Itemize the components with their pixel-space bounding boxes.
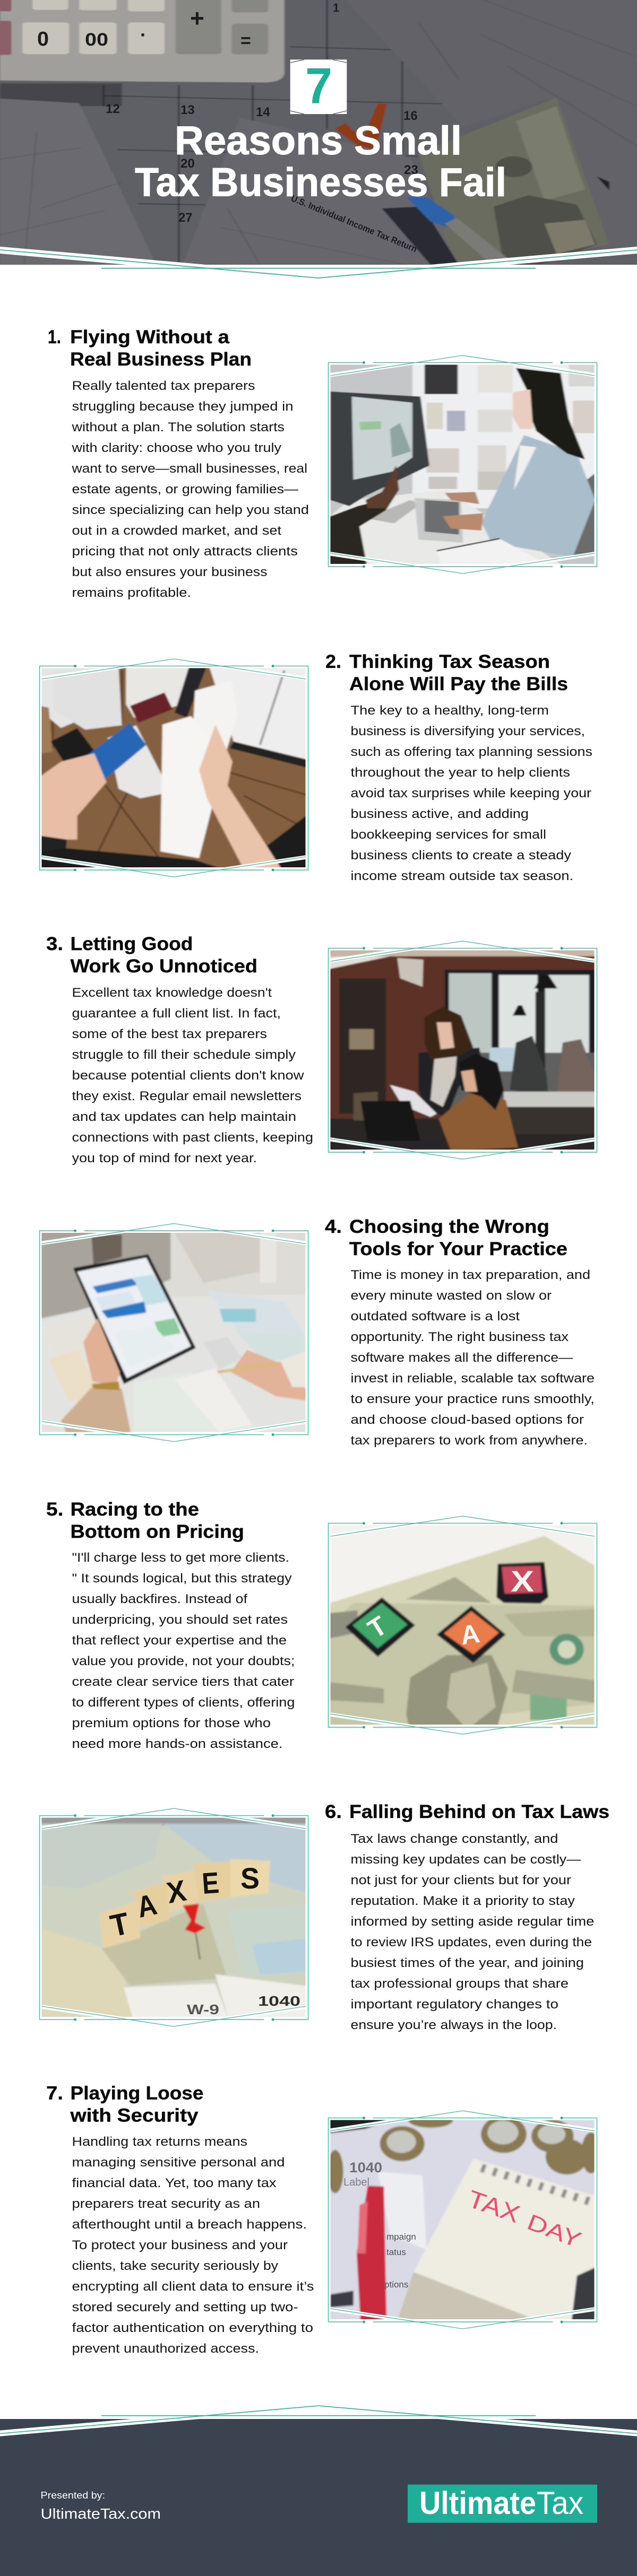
body text 4: opportunity. The right business tax <box>350 1330 569 1344</box>
body text 6: missing key updates can be costly— <box>350 1852 581 1867</box>
body text 7: stored securely and setting up two- <box>72 2300 298 2314</box>
form labels and handwriting: TAX <box>464 2185 523 2228</box>
heading 5 <box>46 1499 244 1542</box>
heading 3: 3. <box>46 934 63 954</box>
header calculator and calendar labels: + <box>190 4 204 32</box>
body text 6: not just for your clients but for your <box>350 1873 571 1887</box>
heading 2: 2. <box>325 651 341 672</box>
body text 7: To protect your business and your <box>72 2238 288 2252</box>
number badge: 7 <box>305 57 332 115</box>
body text 1: with clarity: choose who you truly <box>71 441 281 455</box>
TAX tile letters: T <box>363 1611 392 1644</box>
presented by text: Presented by: <box>40 2490 105 2501</box>
logo: UltimateTax: Tax <box>537 2485 583 2521</box>
body text 5: value you provide, not your doubts; <box>72 1654 295 1668</box>
presented by text <box>40 2490 161 2522</box>
body text 7: afterthought until a breach happens. <box>72 2217 307 2232</box>
title: Reasons Small <box>175 118 462 163</box>
body text 6 <box>350 1832 595 2032</box>
footer chevron band <box>0 2398 637 2434</box>
number badge <box>290 57 347 115</box>
body text 2: throughout the year to help clients <box>350 765 570 780</box>
heading 4 <box>325 1216 567 1259</box>
body text 5: " It sounds logical, but this strategy <box>72 1571 292 1586</box>
body text 6: informed by setting aside regular time <box>350 1914 595 1929</box>
tile letters and form labels <box>107 1861 300 2017</box>
title <box>135 118 506 205</box>
body text 1: pricing that not only attracts clients <box>72 544 298 559</box>
heading 5: 5. <box>46 1499 64 1520</box>
heading 4: Tools for Your Practice <box>349 1239 567 1259</box>
body text 4: and choose cloud-based options for <box>350 1413 584 1427</box>
body text 3: connections with past clients, keeping <box>72 1130 313 1145</box>
section 1: Flying Without a Real Business Plan <box>48 327 605 600</box>
form labels and handwriting: mpaign <box>386 2232 416 2242</box>
body text 3: you top of mind for next year. <box>72 1151 257 1165</box>
body text 6: reputation. Make it a priority to stay <box>350 1894 575 1908</box>
body text 7 <box>72 2135 314 2356</box>
tile letters and form labels: X <box>164 1874 189 1910</box>
header calculator and calendar labels: 14 <box>256 105 270 119</box>
body text 1: estate agents, or growing families— <box>72 482 298 497</box>
logo: UltimateTax: Ultimate <box>419 2485 536 2521</box>
photo frame 5 <box>328 1516 597 1734</box>
body text 4: Time is money in tax preparation, and <box>350 1268 590 1282</box>
body text 2: The key to a healthy, long-term <box>350 703 549 718</box>
body text 3: they exist. Regular email newsletters <box>72 1089 302 1103</box>
header calculator and calendar labels: 0 <box>37 28 49 50</box>
form labels and handwriting: Label <box>343 2177 369 2188</box>
photo 3: colleagues in brick-walled office <box>330 951 595 1150</box>
footer background <box>0 2419 637 2576</box>
heading 5: Racing to the <box>70 1499 199 1520</box>
heading 3 <box>46 934 257 977</box>
body text 4: outdated software is a lost <box>350 1309 520 1324</box>
heading 1: Real Business Plan <box>70 349 252 370</box>
TAX tile letters: A <box>459 1618 481 1650</box>
body text 5: that reflect your expertise and the <box>72 1633 287 1648</box>
heading 1 <box>48 327 252 370</box>
form labels and handwriting: DAY <box>524 2209 585 2252</box>
header calculator and calendar labels: 00 <box>85 30 108 50</box>
body text 5: need more hands-on assistance. <box>72 1737 282 1751</box>
body text 1: Really talented tax preparers <box>72 379 255 393</box>
tile letters and form labels: T <box>107 1906 132 1944</box>
body text 6: busiest times of the year, and joining <box>350 1956 584 1970</box>
logo: UltimateTax <box>408 2485 597 2523</box>
photo frame 7 <box>328 2111 597 2329</box>
body text 2 <box>350 703 592 883</box>
tile letters and form labels: A <box>134 1887 160 1924</box>
heading 4: Choosing the Wrong <box>349 1216 549 1237</box>
tile letters and form labels: W-9 <box>187 2001 219 2017</box>
body text 6: to review IRS updates, even during the <box>350 1935 592 1950</box>
heading 3: Letting Good <box>70 934 193 954</box>
body text 1: without a plan. The solution starts <box>71 420 285 434</box>
photo frame 4 <box>39 1223 308 1442</box>
photo 1: woman working at computer in office <box>330 365 595 564</box>
body text 7: prevent unauthorized access. <box>72 2342 259 2356</box>
header calculator and calendar labels: 16 <box>403 109 418 123</box>
form labels and handwriting <box>343 2160 585 2290</box>
header calculator and calendar labels <box>37 1 418 254</box>
body text 1: remains profitable. <box>72 586 191 600</box>
header calculator and calendar labels: U.S. Individual Income Tax Return <box>289 193 418 254</box>
body text 1 <box>71 379 309 600</box>
body text 4: to ensure your practice runs smoothly, <box>350 1392 595 1406</box>
heading 2: Thinking Tax Season <box>349 651 550 672</box>
header calculator and calendar labels: 27 <box>178 211 193 225</box>
body text 1: since specializing can help you stand <box>72 503 309 517</box>
body text 6: tax professional groups that share <box>350 1977 569 1991</box>
photo 5: TAX tiles on dollar bills <box>321 1517 605 1733</box>
body text 6: important regulatory changes to <box>350 1997 558 2012</box>
body text 7: Handling tax returns means <box>72 2135 247 2149</box>
heading 1: Flying Without a <box>70 327 230 347</box>
photo frame 6 <box>39 1808 308 2026</box>
body text 5: underpricing, you should set rates <box>72 1613 288 1627</box>
form labels and handwriting: ptions <box>384 2279 408 2290</box>
heading 2: Alone Will Pay the Bills <box>349 674 568 694</box>
header calculator and calendar labels: 1 <box>333 1 339 14</box>
photo frame 3 <box>328 941 597 1159</box>
body text 4: invest in reliable, scalable tax software <box>350 1371 595 1386</box>
header calculator and calendar labels: = <box>240 31 251 51</box>
body text 3: struggle to fill their schedule simply <box>72 1048 296 1062</box>
body text 2: business clients to create a steady <box>350 848 571 863</box>
heading 6: 6. <box>325 1802 342 1822</box>
header calculator and calendar labels: 13 <box>180 103 195 117</box>
heading 3: Work Go Unnoticed <box>70 956 257 977</box>
section 6: Falling Behind on Tax Laws <box>32 1802 609 2032</box>
tile letters and form labels: 1040 <box>258 1993 300 2009</box>
header calculator and calendar labels: 23 <box>404 163 418 177</box>
body text 5 <box>72 1551 295 1751</box>
footer <box>0 2398 637 2576</box>
heading 7: Playing Loose <box>70 2083 204 2104</box>
body text 3: some of the best tax preparers <box>72 1027 267 1041</box>
section 4: Choosing the Wrong Tools for Your Practice <box>32 1216 595 1448</box>
body text 6: ensure you’re always in the loop. <box>350 2018 557 2032</box>
header calculator and calendar labels: 20 <box>180 156 195 171</box>
body text 7: managing sensitive personal and <box>72 2155 285 2170</box>
heading 5: Bottom on Pricing <box>70 1521 244 1542</box>
body text 1: struggling because they jumped in <box>72 399 293 414</box>
white and teal chevron band <box>0 250 637 291</box>
body text 1: want to serve—small businesses, real <box>71 462 307 476</box>
photo frame 1 <box>328 355 597 573</box>
TAX tile letters: X <box>511 1564 534 1598</box>
body text 2: income stream outside tax season. <box>350 869 573 883</box>
body text 6: Tax laws change constantly, and <box>350 1832 558 1846</box>
section 5: Racing to the Bottom on Pricing <box>46 1499 605 1751</box>
body text 2: avoid tax surprises while keeping your <box>350 786 591 800</box>
heading 4: 4. <box>325 1216 342 1237</box>
photo 4: tablet showing charts over tax papers <box>41 1233 306 1432</box>
body text 3: Excellent tax knowledge doesn't <box>72 986 272 1000</box>
tile letters and form labels: E <box>201 1866 220 1900</box>
heading 7: with Security <box>70 2105 199 2126</box>
body text 7: encrypting all client data to ensure it’s <box>72 2279 314 2294</box>
presented by text: UltimateTax.com <box>40 2505 161 2522</box>
body text 2: business active, and adding <box>350 807 529 821</box>
form labels and handwriting: 1040 <box>349 2160 382 2175</box>
header: photo banner with title <box>0 0 637 291</box>
body text 2: such as offering tax planning sessions <box>350 745 592 759</box>
header calculator and calendar labels: 12 <box>106 102 120 116</box>
photo 6: TAXES tiles and red pin on a map <box>32 1811 317 2026</box>
body text 7: preparers treat security as an <box>72 2197 260 2211</box>
body text 3: and tax updates can help maintain <box>72 1110 296 1124</box>
body text 1: out in a crowded market, and set <box>72 524 281 538</box>
section 7: Playing Loose with Security <box>46 2083 605 2356</box>
heading 6: Falling Behind on Tax Laws <box>349 1802 609 1822</box>
title: Tax Businesses Fail <box>135 160 506 205</box>
section 3: Letting Good Work Go Unnoticed <box>46 934 605 1165</box>
body text 4: tax preparers to work from anywhere. <box>350 1433 588 1448</box>
header calculator and calendar labels: · <box>140 24 147 46</box>
body text 3: because potential clients don't know <box>72 1068 304 1083</box>
body text 7: clients, take security seriously by <box>72 2259 278 2273</box>
body text 5: create clear service tiers that cater <box>72 1675 294 1689</box>
form labels and handwriting: tatus <box>386 2247 406 2257</box>
heading 7: 7. <box>46 2083 63 2104</box>
heading 7 <box>46 2083 204 2126</box>
heading 2 <box>325 651 568 694</box>
body text 5: premium options for those who <box>72 1716 271 1730</box>
body text 1: but also ensures your business <box>72 565 268 579</box>
section 2: Thinking Tax Season Alone Will Pay the Bills <box>32 651 592 883</box>
tile letters and form labels: S <box>240 1861 260 1895</box>
body text 3 <box>72 986 313 1165</box>
photo frame 2 <box>39 659 308 877</box>
TAX tile letters <box>363 1564 534 1650</box>
body text 3: guarantee a full client list. In fact, <box>72 1006 281 1021</box>
body text 5: to different types of clients, offering <box>72 1695 295 1710</box>
photo 2: hands holding credit card and receipts <box>41 668 306 867</box>
body text 4: every minute wasted on slow or <box>350 1289 552 1303</box>
photo 7: TAX DAY notepad, coins and red pen <box>321 2112 605 2328</box>
body text 4 <box>350 1268 595 1448</box>
body text 4: software makes all the difference— <box>350 1351 573 1365</box>
body text 2: business is diversifying your services, <box>350 724 585 738</box>
body text 2: bookkeeping services for small <box>350 828 546 842</box>
body text 7: factor authentication on everything to <box>72 2321 313 2335</box>
body text 5: usually backfires. Instead of <box>72 1592 247 1606</box>
body text 7: financial data. Yet, too many tax <box>72 2176 276 2190</box>
body text 5: "I'll charge less to get more clients. <box>72 1551 289 1565</box>
header background photo: calculator, calendar, tax forms and money <box>0 0 637 276</box>
heading 1: 1. <box>48 327 61 347</box>
